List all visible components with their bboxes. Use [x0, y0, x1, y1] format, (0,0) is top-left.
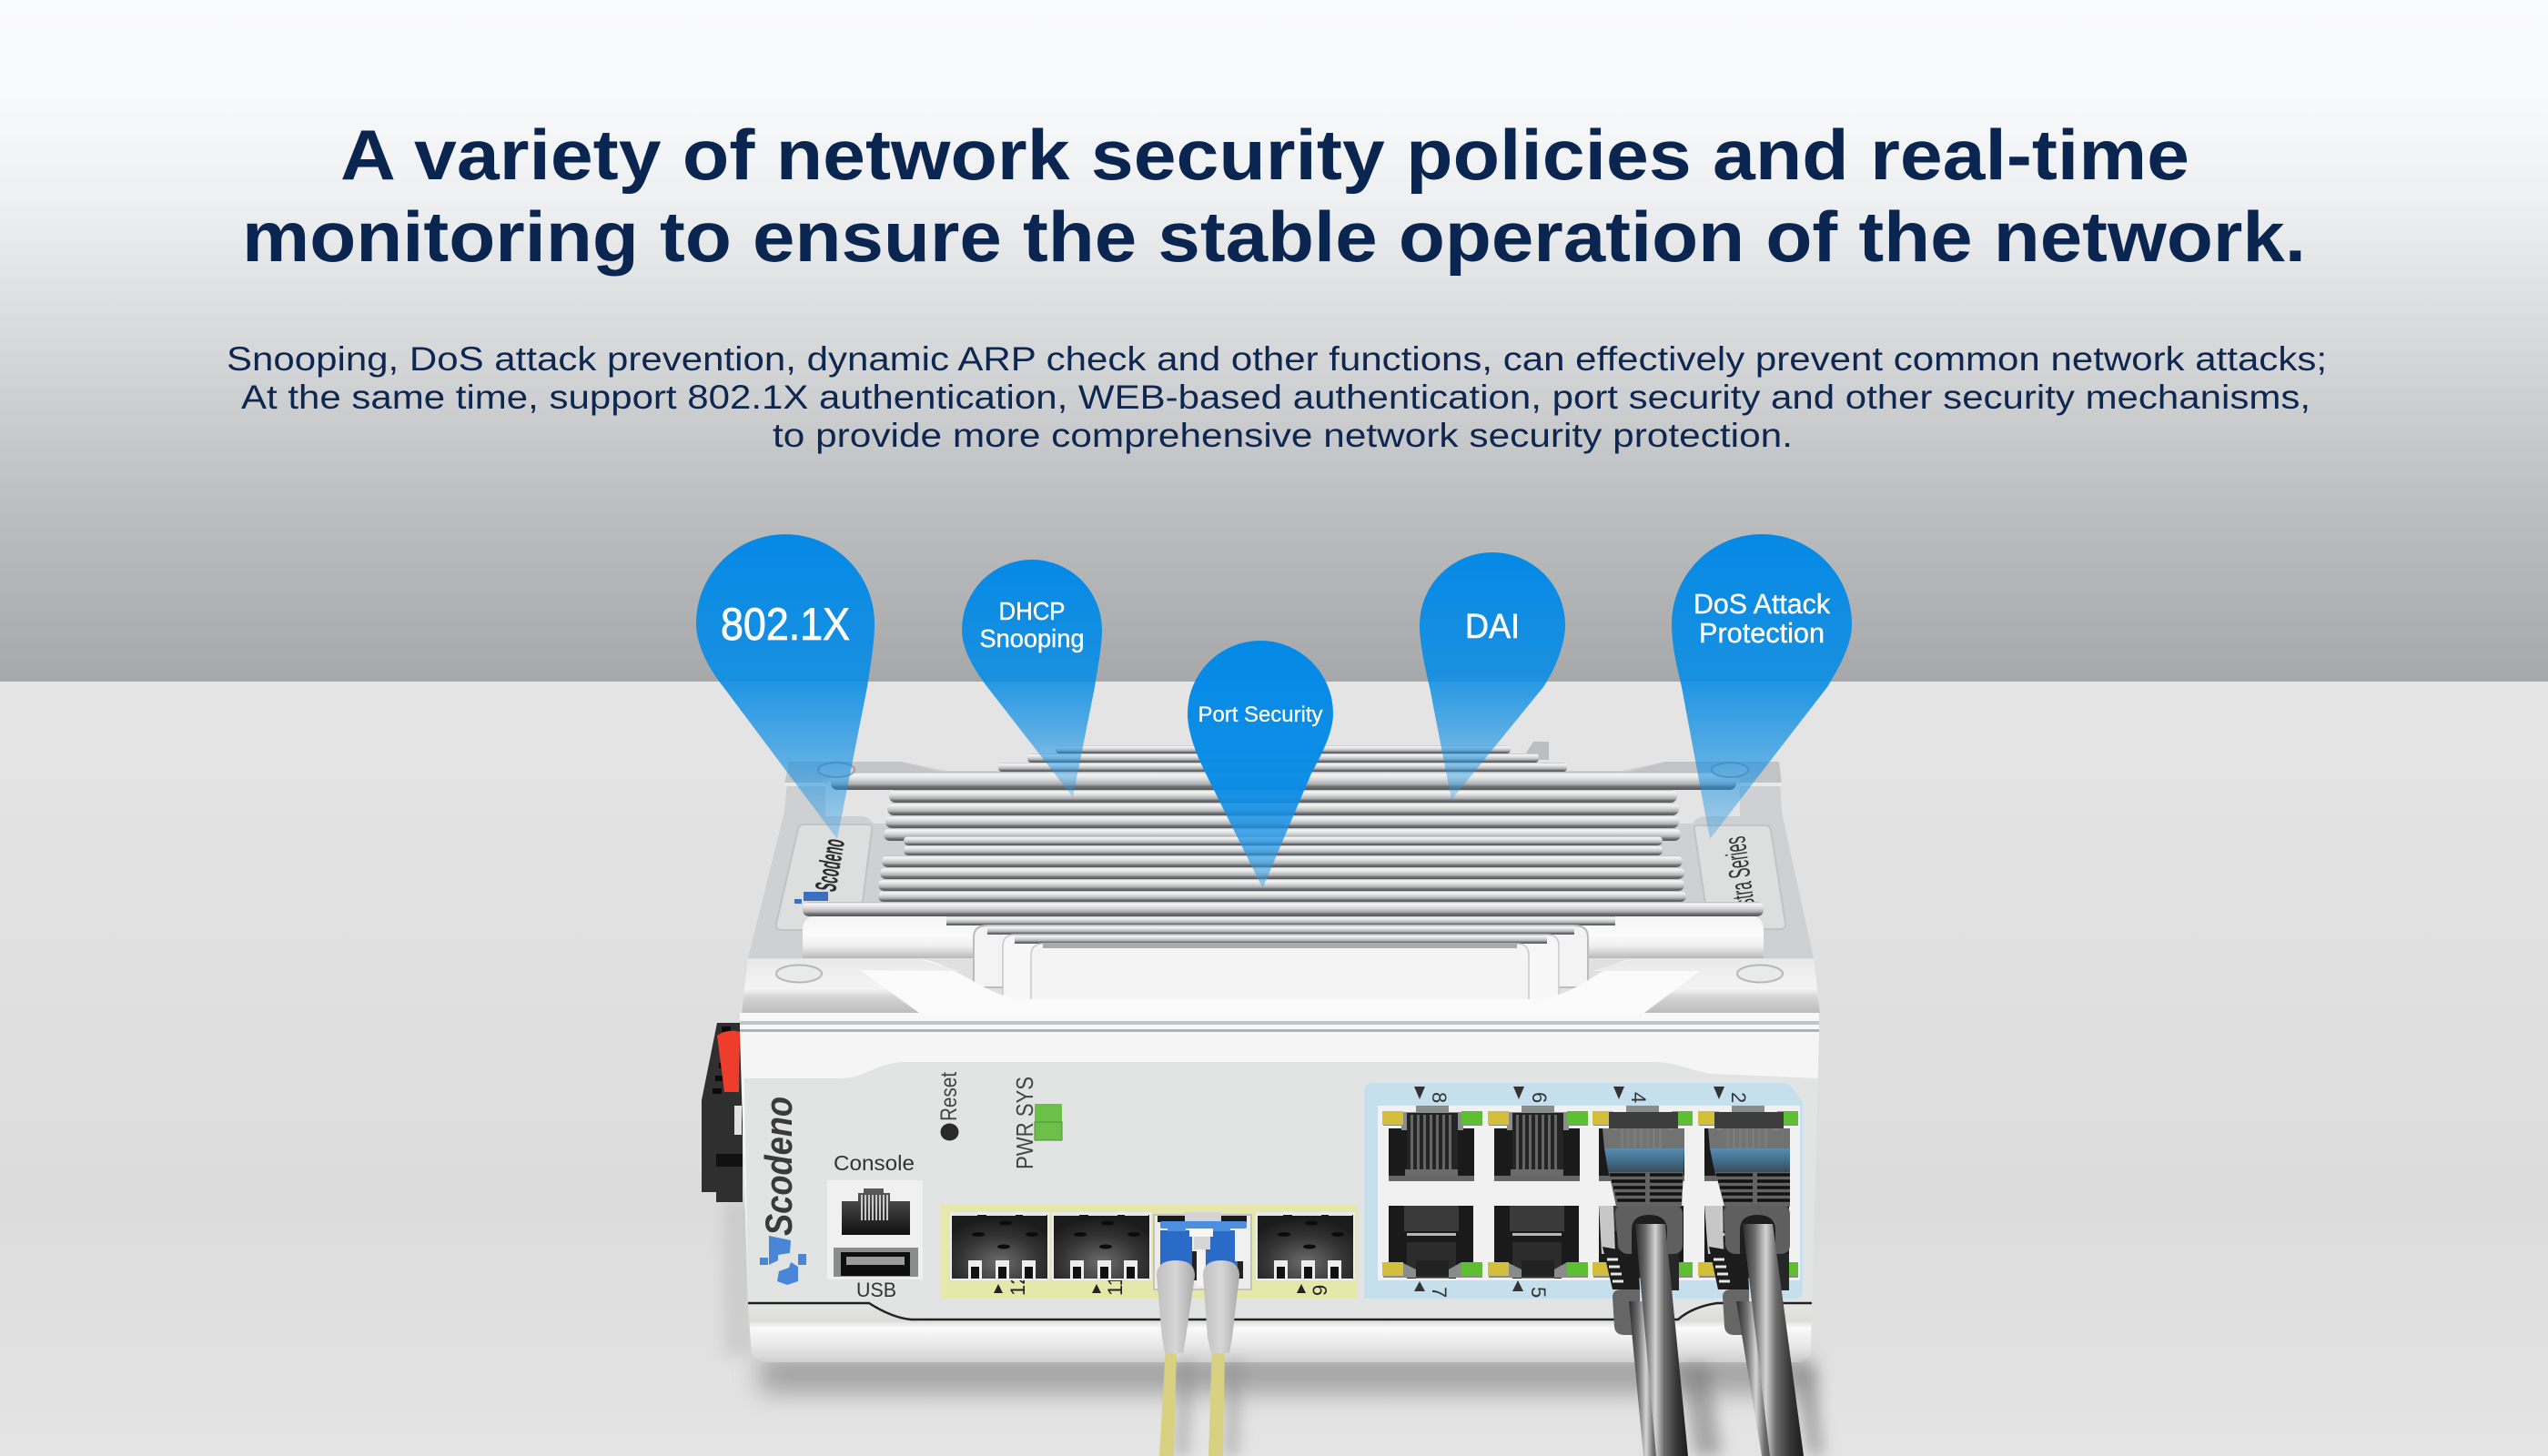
brand logo vertical [757, 1097, 806, 1285]
bottom rail [748, 1303, 1812, 1362]
pin: DoS Attack Protection: DoS Attack [1694, 588, 1830, 620]
port 1 [1698, 1206, 1798, 1279]
pin: DHCP Snooping: Snooping [979, 624, 1085, 652]
SFP port with LC transceiver [1154, 1212, 1251, 1289]
pin: DHCP Snooping: DHCP [999, 597, 1065, 625]
power and system LEDs [1011, 1077, 1062, 1169]
heat sink top body [748, 742, 1814, 958]
lower plug left [1599, 1204, 1679, 1456]
fibre boots [1157, 1260, 1195, 1353]
upper plug right [1708, 1112, 1804, 1456]
SFP port 11 [1052, 1212, 1151, 1280]
LC bodies [1160, 1230, 1192, 1269]
front lid with recess [803, 902, 1764, 1001]
port 8 [1382, 1106, 1482, 1181]
SFP port labels [994, 1274, 1331, 1296]
pin: DHCP Snooping [962, 560, 1102, 797]
pin: 802.1X [696, 534, 875, 839]
title [242, 115, 2306, 277]
left label plate: Scodeno [808, 836, 851, 894]
SFP port labels: 11 [1104, 1275, 1127, 1296]
port 4 [1592, 1106, 1693, 1181]
pin: DAI [1420, 552, 1565, 800]
device shadow [723, 1201, 1806, 1392]
cooling fins [831, 745, 1736, 902]
console and USB ports [827, 1151, 923, 1301]
port labels: 5 [1527, 1287, 1550, 1298]
SFP port labels: 9 [1309, 1285, 1331, 1296]
reset button and label: Reset [936, 1072, 962, 1121]
cable shadows [1682, 1365, 1722, 1456]
port 2 [1698, 1106, 1798, 1181]
port 3 [1592, 1206, 1693, 1279]
power and system LEDs: PWR SYS [1011, 1077, 1038, 1169]
pin: DoS Attack Protection: Protection [1699, 617, 1825, 649]
port labels: 4 [1627, 1092, 1650, 1103]
SFP port 12 [950, 1212, 1049, 1280]
brand logo vertical: Scodeno [757, 1097, 800, 1236]
port 6 [1488, 1106, 1588, 1181]
title: monitoring to ensure the stable operation of the network. [242, 197, 2306, 277]
ethernet cables [1599, 1112, 1823, 1456]
background wall gradient [0, 0, 2548, 682]
port labels: 6 [1528, 1092, 1551, 1103]
console and USB ports: USB [856, 1279, 896, 1301]
yellow fibres [1159, 1347, 1177, 1456]
description text: At the same time, support 802.1X authentication, WEB-based authentication, port security and other security mechanisms, [241, 379, 2310, 416]
description text [227, 340, 2327, 454]
description text: Snooping, DoS attack prevention, dynamic ARP check and other functions, can effectively prevent common network attacks; [227, 340, 2327, 378]
SFP port labels: 12 [1006, 1274, 1029, 1296]
SFP port group [940, 1205, 1358, 1299]
right label plate [1694, 825, 1785, 929]
pin: DAI: DAI [1465, 608, 1520, 646]
front chamfer pieces [742, 959, 1820, 1013]
description text: to provide more comprehensive network security protection. [773, 417, 1793, 454]
port labels: 8 [1428, 1092, 1451, 1103]
fibre optic cables [1157, 1221, 1249, 1456]
pin: Port Security: Port Security [1198, 703, 1323, 727]
pin: 802.1X: 802.1X [721, 599, 850, 650]
LC latch [1160, 1221, 1247, 1231]
device: industrial switch [702, 742, 1823, 1456]
SFP port 9 [1256, 1212, 1355, 1280]
right label plate: Astra Series [1717, 834, 1762, 918]
terminal block connector [702, 1023, 743, 1202]
title: A variety of network security policies and real-time [340, 115, 2189, 195]
port labels: 2 [1727, 1092, 1750, 1103]
RJ45 port group [1364, 1083, 1803, 1299]
lower plug right [1704, 1204, 1789, 1456]
pin: DoS Attack Protection [1672, 534, 1852, 839]
fibre shadows [1174, 1360, 1194, 1456]
port 5 [1488, 1206, 1588, 1279]
console and USB ports: Console [834, 1151, 915, 1175]
reset button and label [936, 1072, 962, 1141]
front wall band [740, 1013, 1819, 1303]
port labels: 7 [1428, 1287, 1451, 1298]
pin: Port Security [1188, 641, 1333, 888]
left label plate [776, 824, 872, 930]
background floor [0, 682, 2548, 1456]
LC centre clip [1189, 1228, 1249, 1286]
port labels [1414, 1087, 1750, 1298]
upper plug left [1603, 1112, 1688, 1456]
port 7 [1382, 1206, 1482, 1279]
front panel [744, 1062, 1818, 1320]
